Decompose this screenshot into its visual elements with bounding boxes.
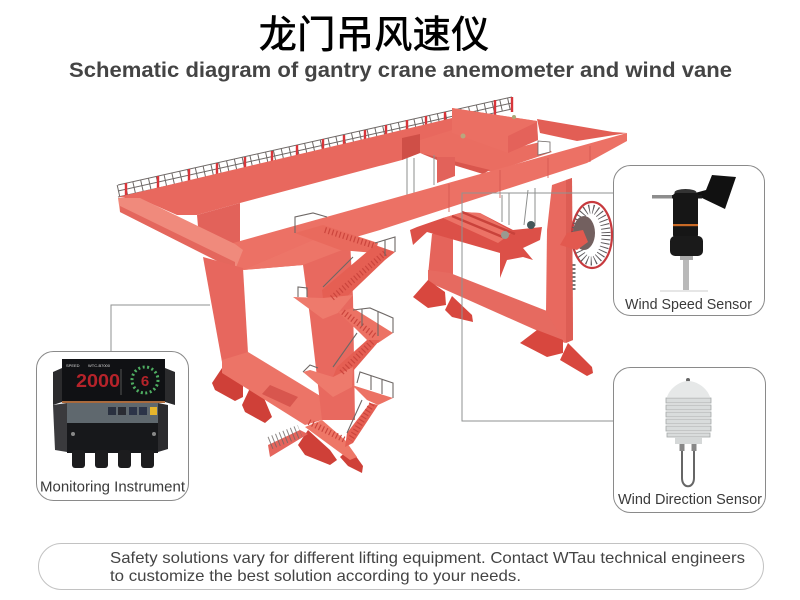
panel: footer note [38,544,764,590]
crane left end beam [118,198,243,270]
label: wind direction sensor: Wind Direction Sensor [618,491,762,508]
connector lines [111,193,613,421]
icon: monitoring instrument [53,359,175,468]
crane far left leg [437,157,455,183]
crane cable reel [560,202,612,290]
icon: monitoring instrument: 6 [141,373,149,390]
crane trolley deck [420,130,552,174]
crane far leg stub behind end beam [197,203,240,250]
crane far feet [413,280,593,376]
panel: wind direction sensor [614,368,766,512]
icon: monitoring instrument: SPEED [66,363,80,368]
crane staircases [293,225,395,447]
crane front girder [233,133,627,270]
crane left leg [203,257,248,362]
footer text line 2: to customize the best solution according to your needs. [110,568,521,585]
crane stair railings [295,213,395,433]
gantry crane illustration [118,97,627,473]
crane far right leg [546,178,573,343]
crane far walkway railing [118,97,512,198]
crane trolley house [452,108,538,153]
crane lower platform [305,420,357,460]
panel: monitoring instrument [36,352,188,500]
icon: wind speed sensor [652,175,736,291]
crane far girder [118,118,452,215]
label: wind speed sensor: Wind Speed Sensor [625,296,752,313]
subtitle: Schematic diagram of gantry crane anemometer and wind vane [69,59,732,82]
icon: monitoring instrument: WTC-B7000 [88,363,111,368]
panel: wind speed sensor [614,166,764,316]
crane hoist ropes [407,155,535,226]
footer text line 1: Safety solutions vary for different lifting equipment. Contact WTau technical engineers [110,550,745,567]
label: monitoring instrument: Monitoring Instrument [40,478,186,496]
crane right end beam [537,119,627,141]
icon: monitoring instrument: 2000 [76,371,120,391]
crane near feet [212,368,363,473]
title: 龙门吊风速仪 [258,14,490,57]
crane bottom stair [268,430,308,457]
crane near leg [243,240,355,420]
crane lower tie beam [222,352,322,425]
icon: wind direction sensor [666,378,711,486]
crane spreader [410,212,542,278]
